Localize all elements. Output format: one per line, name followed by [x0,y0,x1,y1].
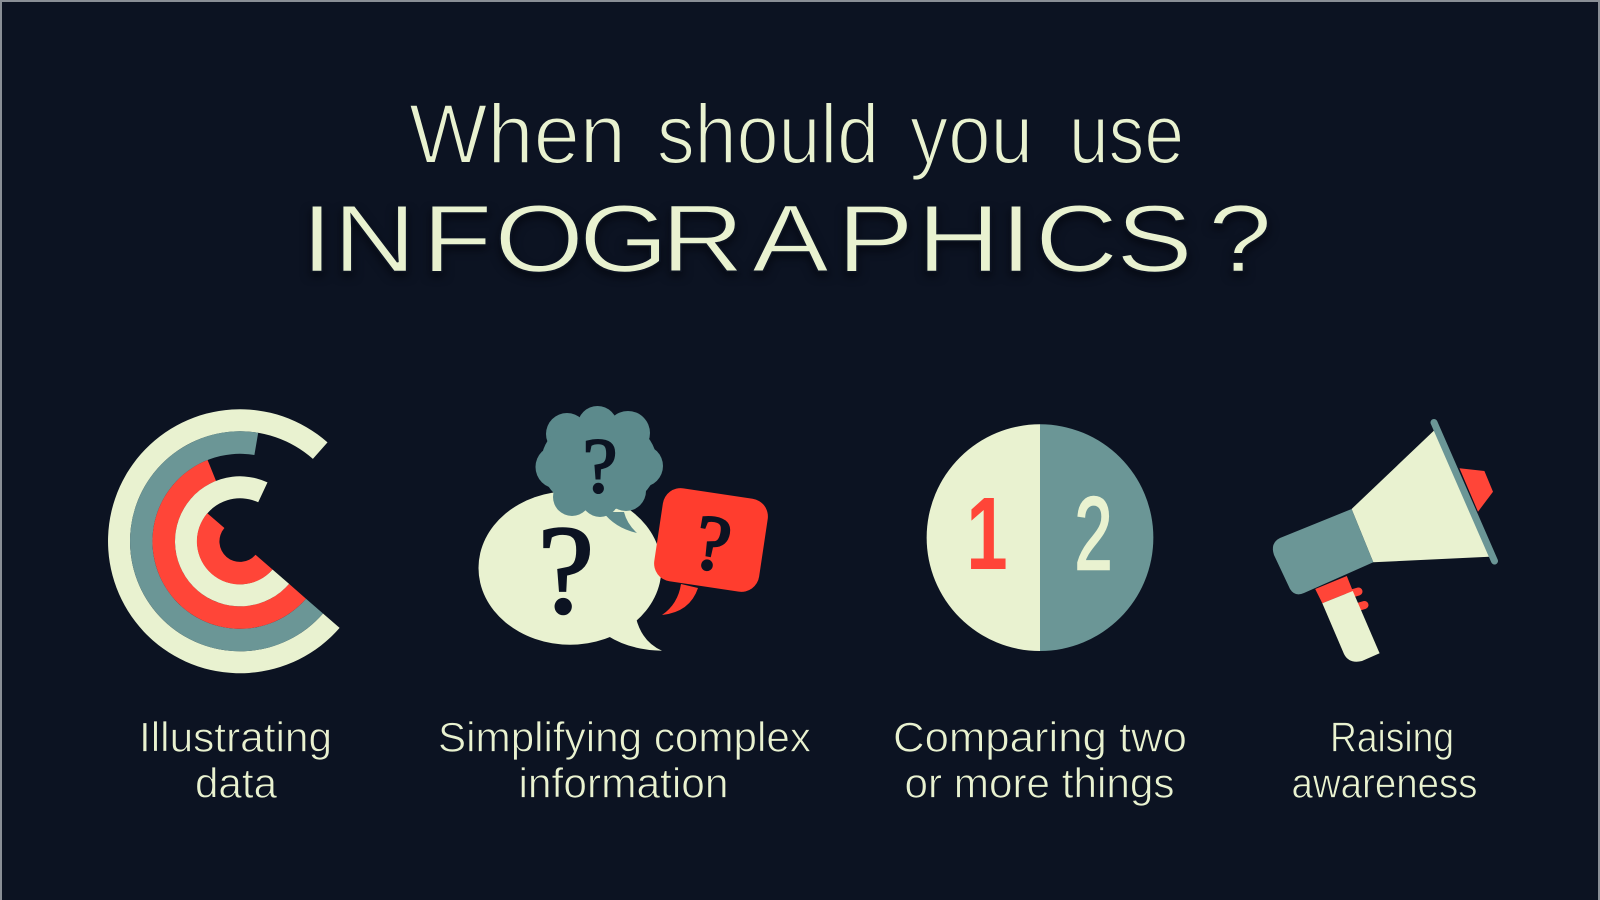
title [301,87,1272,292]
cream speech bubble [478,491,662,651]
title line: When should you use: use [1069,87,1184,181]
number 1: 1 [966,477,1008,592]
label: Illustrating data: data [195,760,278,807]
megaphone body [1273,509,1373,594]
megaphone handle collar [1315,576,1353,603]
cream speech bubble: ? [538,501,594,640]
megaphone cone [1352,430,1489,562]
label: Comparing two or more things: Comparing two [893,714,1187,761]
title line: INFOGRAPHICS?: INFOGRAPHICS? [301,185,1272,292]
label: Comparing two or more things [893,714,1187,807]
icon: speech bubbles with question marks [478,406,770,651]
label: Raising awareness: awareness [1292,760,1478,807]
label: Comparing two or more things: or more things [904,760,1174,807]
label: Raising awareness: Raising [1330,714,1454,761]
red speech box [652,486,770,615]
number 2: 2 [1075,477,1112,591]
icon: megaphone [1273,422,1494,662]
title line: When should you use [409,87,1184,181]
label: Illustrating data [139,714,332,807]
teal thought cloud: ? [583,422,617,509]
megaphone rim [1434,422,1494,561]
megaphone handle grip [1322,591,1380,662]
label: Simplifying complex information [438,714,811,807]
title line: When should you use: When [409,87,626,181]
label: Illustrating data: Illustrating [139,714,332,761]
megaphone buttons [1350,592,1364,608]
label: Simplifying complex information: Simplifying complex [438,714,811,761]
label: Simplifying complex information: information [518,760,728,807]
icon: radial bar chart [108,409,340,673]
title line: When should you use: should [657,87,879,181]
megaphone back [1460,468,1493,512]
icon: comparison circle with numbers [927,424,1153,651]
teal thought cloud [536,406,663,533]
title line: When should you use: you [910,87,1033,181]
label: Raising awareness [1292,714,1478,807]
red speech box: ? [688,497,737,589]
